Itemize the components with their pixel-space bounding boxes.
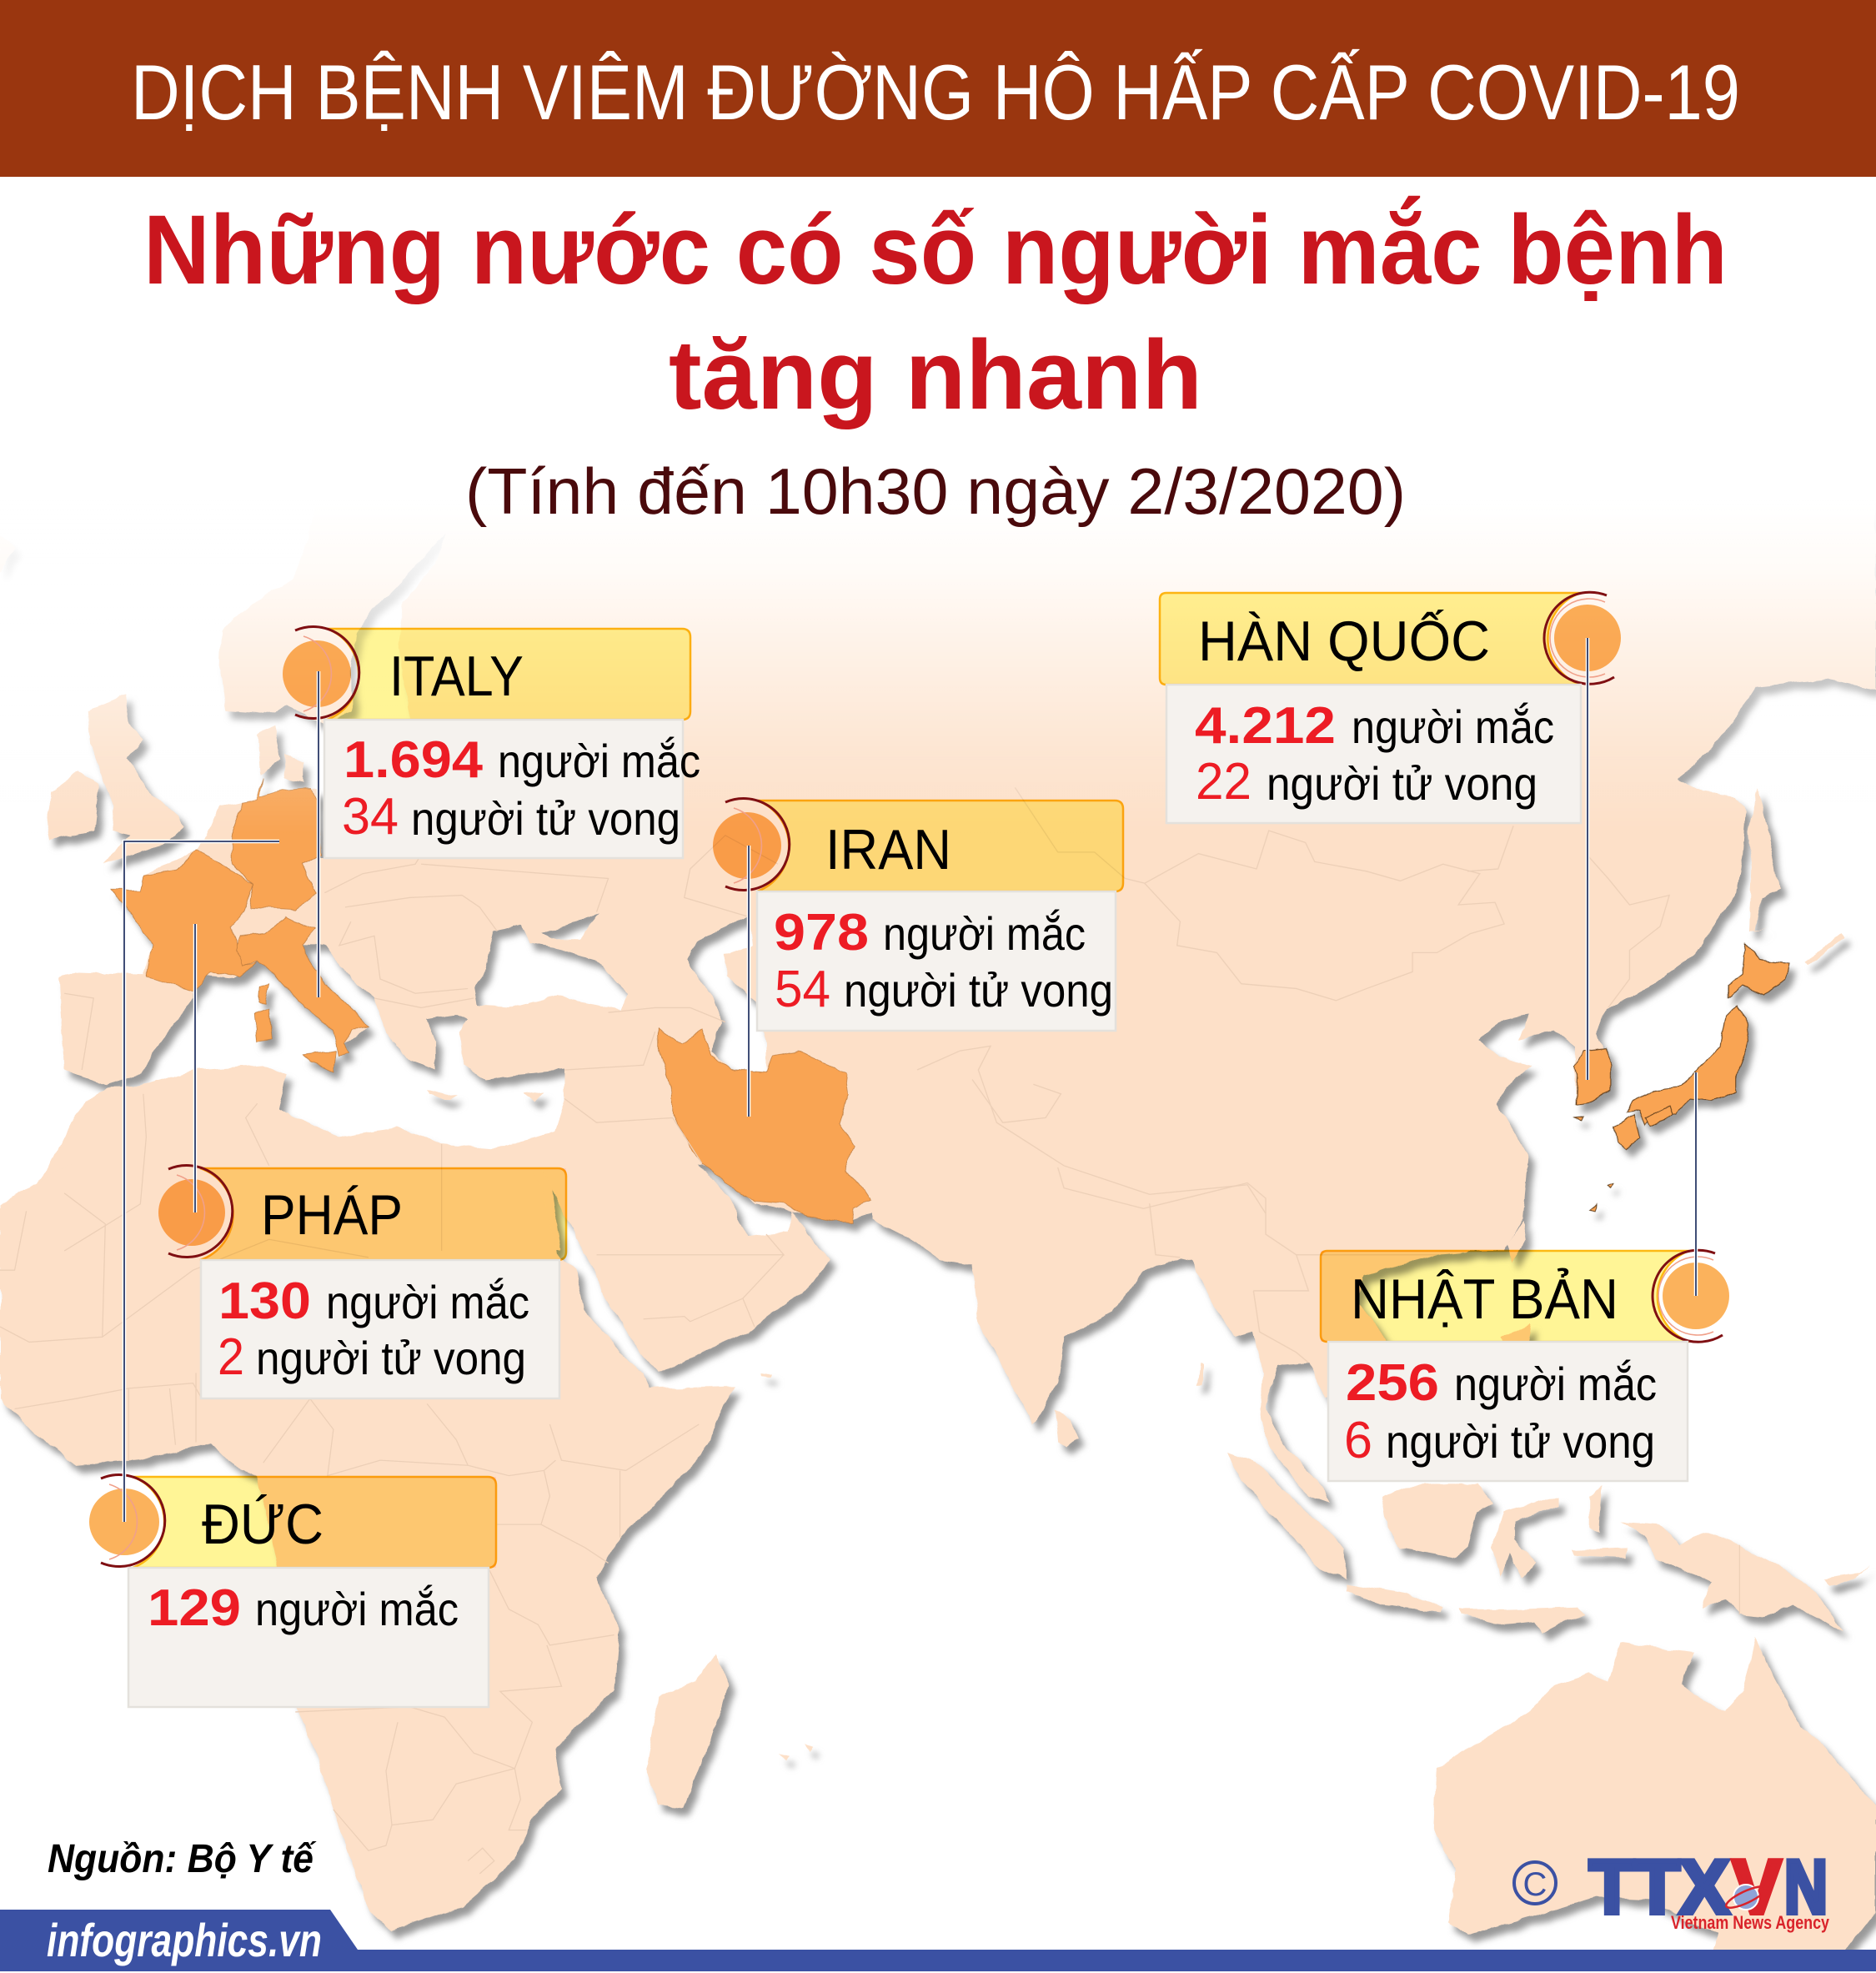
panel: France: 130 [218,1273,311,1330]
panel: Iran: 54 [775,961,830,1018]
header band [0,0,1876,177]
footer band [0,1910,1876,1971]
main title: tăng nhanh [669,320,1202,430]
main title: Những nước có số người mắc bệnh [143,195,1728,305]
panel: South Korea: người mắc [1352,700,1554,753]
panel: Germany: ĐỨC [202,1493,324,1556]
panel: Italy [283,627,700,997]
date subtitle: (Tính đến 10h30 ngày 2/3/2020) [465,454,1406,528]
copyright symbol: C [1523,1866,1547,1903]
panel: South Korea: người tử vong [1267,757,1537,810]
panel: France: PHÁP [261,1183,403,1247]
panel: Japan: người mắc [1454,1358,1657,1410]
panel: South Korea: HÀN QUỐC [1198,609,1490,673]
panel: Iran: người tử vong [844,964,1113,1017]
panel: France: 2 [218,1328,244,1386]
panel: France: người mắc [326,1276,529,1328]
panel: Italy: 34 [342,788,399,846]
panel: France: người tử vong [256,1332,526,1384]
logo: TTXVN [1514,1845,1830,1933]
main title [143,195,1728,430]
panel: Italy: người tử vong [411,792,680,845]
logo tagline: Vietnam News Agency [1671,1912,1830,1933]
panel: Italy: người mắc [498,735,700,787]
panel: Iran: IRAN [825,818,951,881]
world map background [0,539,1876,1950]
footer site name: infographics.vn [47,1914,322,1966]
panel: Japan [1321,1072,1729,1481]
top fade over map [0,167,1876,834]
copyright symbol [1514,1862,1556,1904]
logo wordmark [1589,1845,1828,1930]
panel: Japan: 256 [1346,1354,1439,1412]
panel: South Korea: 22 [1196,753,1252,811]
logo wordmark: TTX [1589,1845,1729,1930]
panel: Iran [713,799,1123,1117]
logo wordmark: V [1733,1845,1781,1930]
panel: Japan: NHẬT BẢN [1351,1267,1618,1331]
panel: Iran: 978 [774,904,869,961]
logo wordmark: N [1784,1845,1828,1930]
panel: South Korea [1160,592,1621,1080]
panel: Germany: 129 [148,1579,241,1637]
panel: Italy: 1.694 [344,731,484,789]
panel: Japan: người tử vong [1386,1415,1655,1468]
panel: Germany: người mắc [255,1583,459,1635]
panel: Germany [89,841,496,1707]
panel: France [158,924,566,1398]
panel: Iran: người mắc [883,907,1086,960]
source note: Nguồn: Bộ Y tế [48,1837,317,1881]
panel: Japan: 6 [1344,1412,1372,1469]
panel: South Korea: 4.212 [1195,697,1336,755]
panel: Italy: ITALY [389,645,524,708]
